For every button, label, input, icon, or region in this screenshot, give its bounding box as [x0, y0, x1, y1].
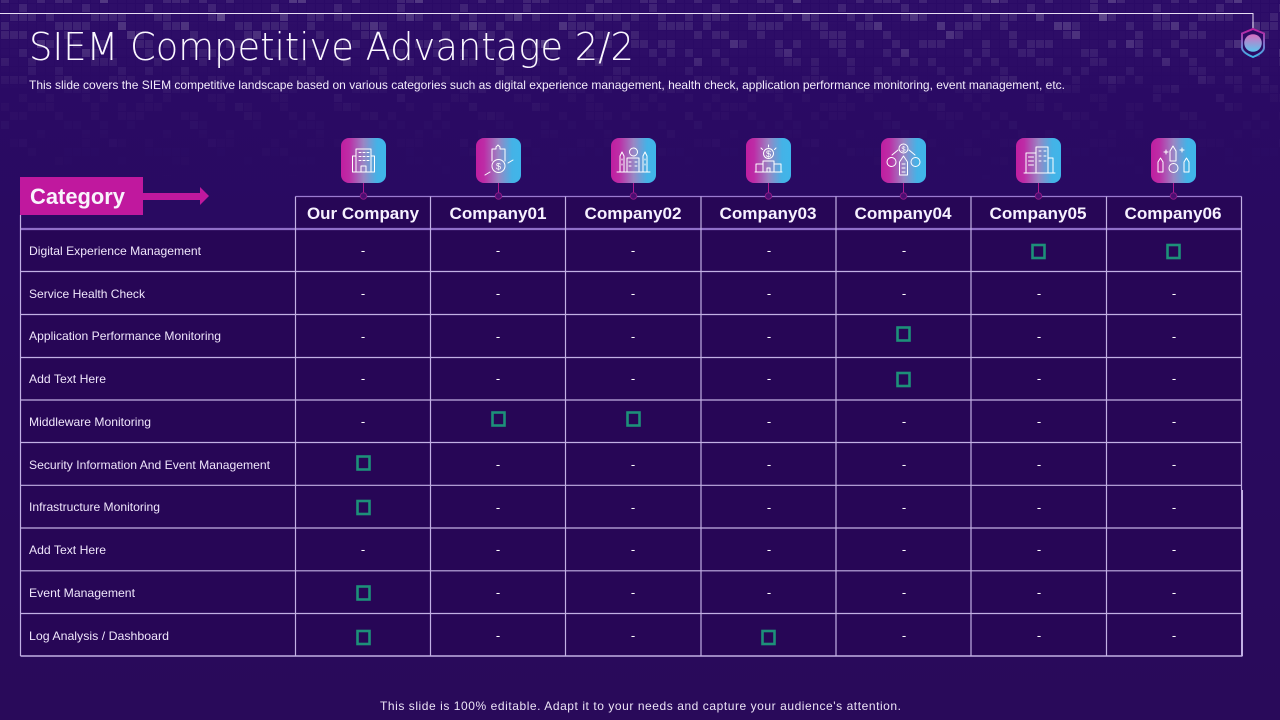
row: Infrastructure Monitoring: -: [631, 500, 635, 515]
header connector line: [0, 14, 1253, 30]
row: Event Management: -: [496, 585, 500, 600]
row: Application Performance Monitoring: -: [1172, 329, 1176, 344]
row: Add Text Here (second): -: [496, 542, 500, 557]
row: Security Information And Event Management: -: [1037, 457, 1041, 472]
row: Log Analysis / Dashboard: Log Analysis / Dashboard: [29, 629, 169, 643]
row: Digital Experience Management: Digital Experience Management: [29, 244, 202, 258]
icon: tower with three coins: $: [901, 144, 906, 154]
row: Log Analysis / Dashboard: -: [631, 628, 635, 643]
row: Infrastructure Monitoring: Infrastructure Monitoring: [29, 500, 160, 514]
row: Middleware Monitoring: -: [1172, 414, 1176, 429]
row: Service Health Check: [29, 286, 1176, 301]
row: Add Text Here (second): -: [767, 542, 771, 557]
column headers: [307, 205, 1222, 223]
category label with arrow: Category: [30, 184, 126, 209]
row: Event Management: Event Management: [29, 586, 136, 600]
column headers: Company03: [720, 205, 816, 223]
row: Middleware Monitoring: -: [902, 414, 906, 429]
row: Digital Experience Management: -: [631, 243, 635, 258]
row: Add Text Here (second): -: [1037, 542, 1041, 557]
row: Digital Experience Management: -: [902, 243, 906, 258]
row: Add Text Here (second): [29, 542, 1176, 557]
icon: office tower: [341, 138, 386, 199]
row: Middleware Monitoring: -: [767, 414, 771, 429]
row: Service Health Check: -: [496, 286, 500, 301]
row: Service Health Check: Service Health Check: [29, 287, 146, 301]
row: Security Information And Event Management: [29, 456, 1176, 472]
row: Add Text Here: -: [361, 371, 365, 386]
row: Infrastructure Monitoring: -: [496, 500, 500, 515]
icon: rockets and exchange: [1151, 138, 1196, 199]
row: Log Analysis / Dashboard: -: [902, 628, 906, 643]
icon: bank building with dollar sun: $: [766, 149, 771, 159]
row: Security Information And Event Management: -: [631, 457, 635, 472]
row: Digital Experience Management: -: [496, 243, 500, 258]
row: Log Analysis / Dashboard: -: [496, 628, 500, 643]
row: Service Health Check: -: [902, 286, 906, 301]
icon: shield logo: [1242, 29, 1264, 57]
row: Add Text Here (second): -: [361, 542, 365, 557]
row: Middleware Monitoring: [29, 412, 1176, 429]
row: Add Text Here (second): -: [1172, 542, 1176, 557]
row: Application Performance Monitoring: -: [1037, 329, 1041, 344]
row: Application Performance Monitoring: -: [631, 329, 635, 344]
row: Digital Experience Management: -: [767, 243, 771, 258]
row: Security Information And Event Management: -: [496, 457, 500, 472]
table grid: [20, 196, 1242, 656]
icon: skyline with dollar coin: $: [496, 162, 501, 172]
row: Event Management: [29, 585, 1176, 600]
row: Security Information And Event Management: Security Information And Event Management: [29, 458, 271, 472]
row: Digital Experience Management: -: [361, 243, 365, 258]
icon: office buildings: [1016, 138, 1061, 199]
row: Security Information And Event Management: -: [902, 457, 906, 472]
column headers: Company06: [1124, 205, 1222, 223]
column headers: Company04: [854, 205, 952, 223]
row: Log Analysis / Dashboard: -: [1172, 628, 1176, 643]
row: Event Management: -: [902, 585, 906, 600]
row: Infrastructure Monitoring: -: [902, 500, 906, 515]
company icons row: [341, 138, 1196, 199]
row: Application Performance Monitoring: [29, 328, 1176, 344]
row: Add Text Here (second): -: [902, 542, 906, 557]
row: Add Text Here: -: [1037, 371, 1041, 386]
row: Event Management: -: [631, 585, 635, 600]
row: Service Health Check: -: [1172, 286, 1176, 301]
row: Application Performance Monitoring: -: [496, 329, 500, 344]
icon: city with gear: [611, 138, 656, 199]
row: Event Management: -: [767, 585, 771, 600]
row: Digital Experience Management: [29, 243, 1180, 258]
row: Service Health Check: -: [631, 286, 635, 301]
row: Middleware Monitoring: -: [361, 414, 365, 429]
row: Log Analysis / Dashboard: [29, 628, 1176, 644]
row: Middleware Monitoring: -: [1037, 414, 1041, 429]
column headers: Company02: [584, 205, 682, 223]
row: Add Text Here: Add Text Here: [29, 372, 106, 386]
row: Add Text Here: -: [496, 371, 500, 386]
row: Event Management: -: [1037, 585, 1041, 600]
row: Infrastructure Monitoring: -: [1037, 500, 1041, 515]
column headers: Company05: [990, 205, 1086, 223]
row: Security Information And Event Management: -: [1172, 457, 1176, 472]
row: Security Information And Event Management: -: [767, 457, 771, 472]
column headers: Company01: [450, 205, 546, 223]
slide background: [0, 0, 1280, 156]
table background: [20, 196, 1242, 656]
category label with arrow: [20, 177, 209, 215]
row: Application Performance Monitoring: Application Performance Monitoring: [29, 329, 221, 343]
row: Add Text Here: -: [767, 371, 771, 386]
row: Infrastructure Monitoring: -: [767, 500, 771, 515]
row: Add Text Here: [29, 371, 1176, 386]
row: Add Text Here: -: [1172, 371, 1176, 386]
row: Add Text Here: -: [631, 371, 635, 386]
title: SIEM Competitive Advantage 2/2: [29, 25, 634, 69]
row: Application Performance Monitoring: -: [767, 329, 771, 344]
row: Middleware Monitoring: Middleware Monitoring: [29, 415, 151, 429]
row: Infrastructure Monitoring: [29, 500, 1176, 515]
icon: tower with three coins: [881, 138, 926, 199]
row: Application Performance Monitoring: -: [361, 329, 365, 344]
column headers: Our Company: [307, 205, 420, 223]
row: Service Health Check: -: [361, 286, 365, 301]
row: Service Health Check: -: [767, 286, 771, 301]
icon: bank building with dollar sun: [746, 138, 791, 199]
row: Service Health Check: -: [1037, 286, 1041, 301]
row: Event Management: -: [1172, 585, 1176, 600]
table: [20, 196, 1242, 656]
row: Add Text Here (second): -: [631, 542, 635, 557]
row: Log Analysis / Dashboard: -: [1037, 628, 1041, 643]
row: Add Text Here (second): Add Text Here: [29, 543, 106, 557]
footer note: This slide is 100% editable. Adapt it to your needs and capture your audience's attention.: [380, 699, 901, 713]
icon: skyline with dollar coin: [476, 138, 521, 199]
subtitle: This slide covers the SIEM competitive landscape based on various categories such as digital experience management, health check, application performance monitoring, event management, etc.: [29, 78, 1065, 92]
row: Infrastructure Monitoring: -: [1172, 500, 1176, 515]
